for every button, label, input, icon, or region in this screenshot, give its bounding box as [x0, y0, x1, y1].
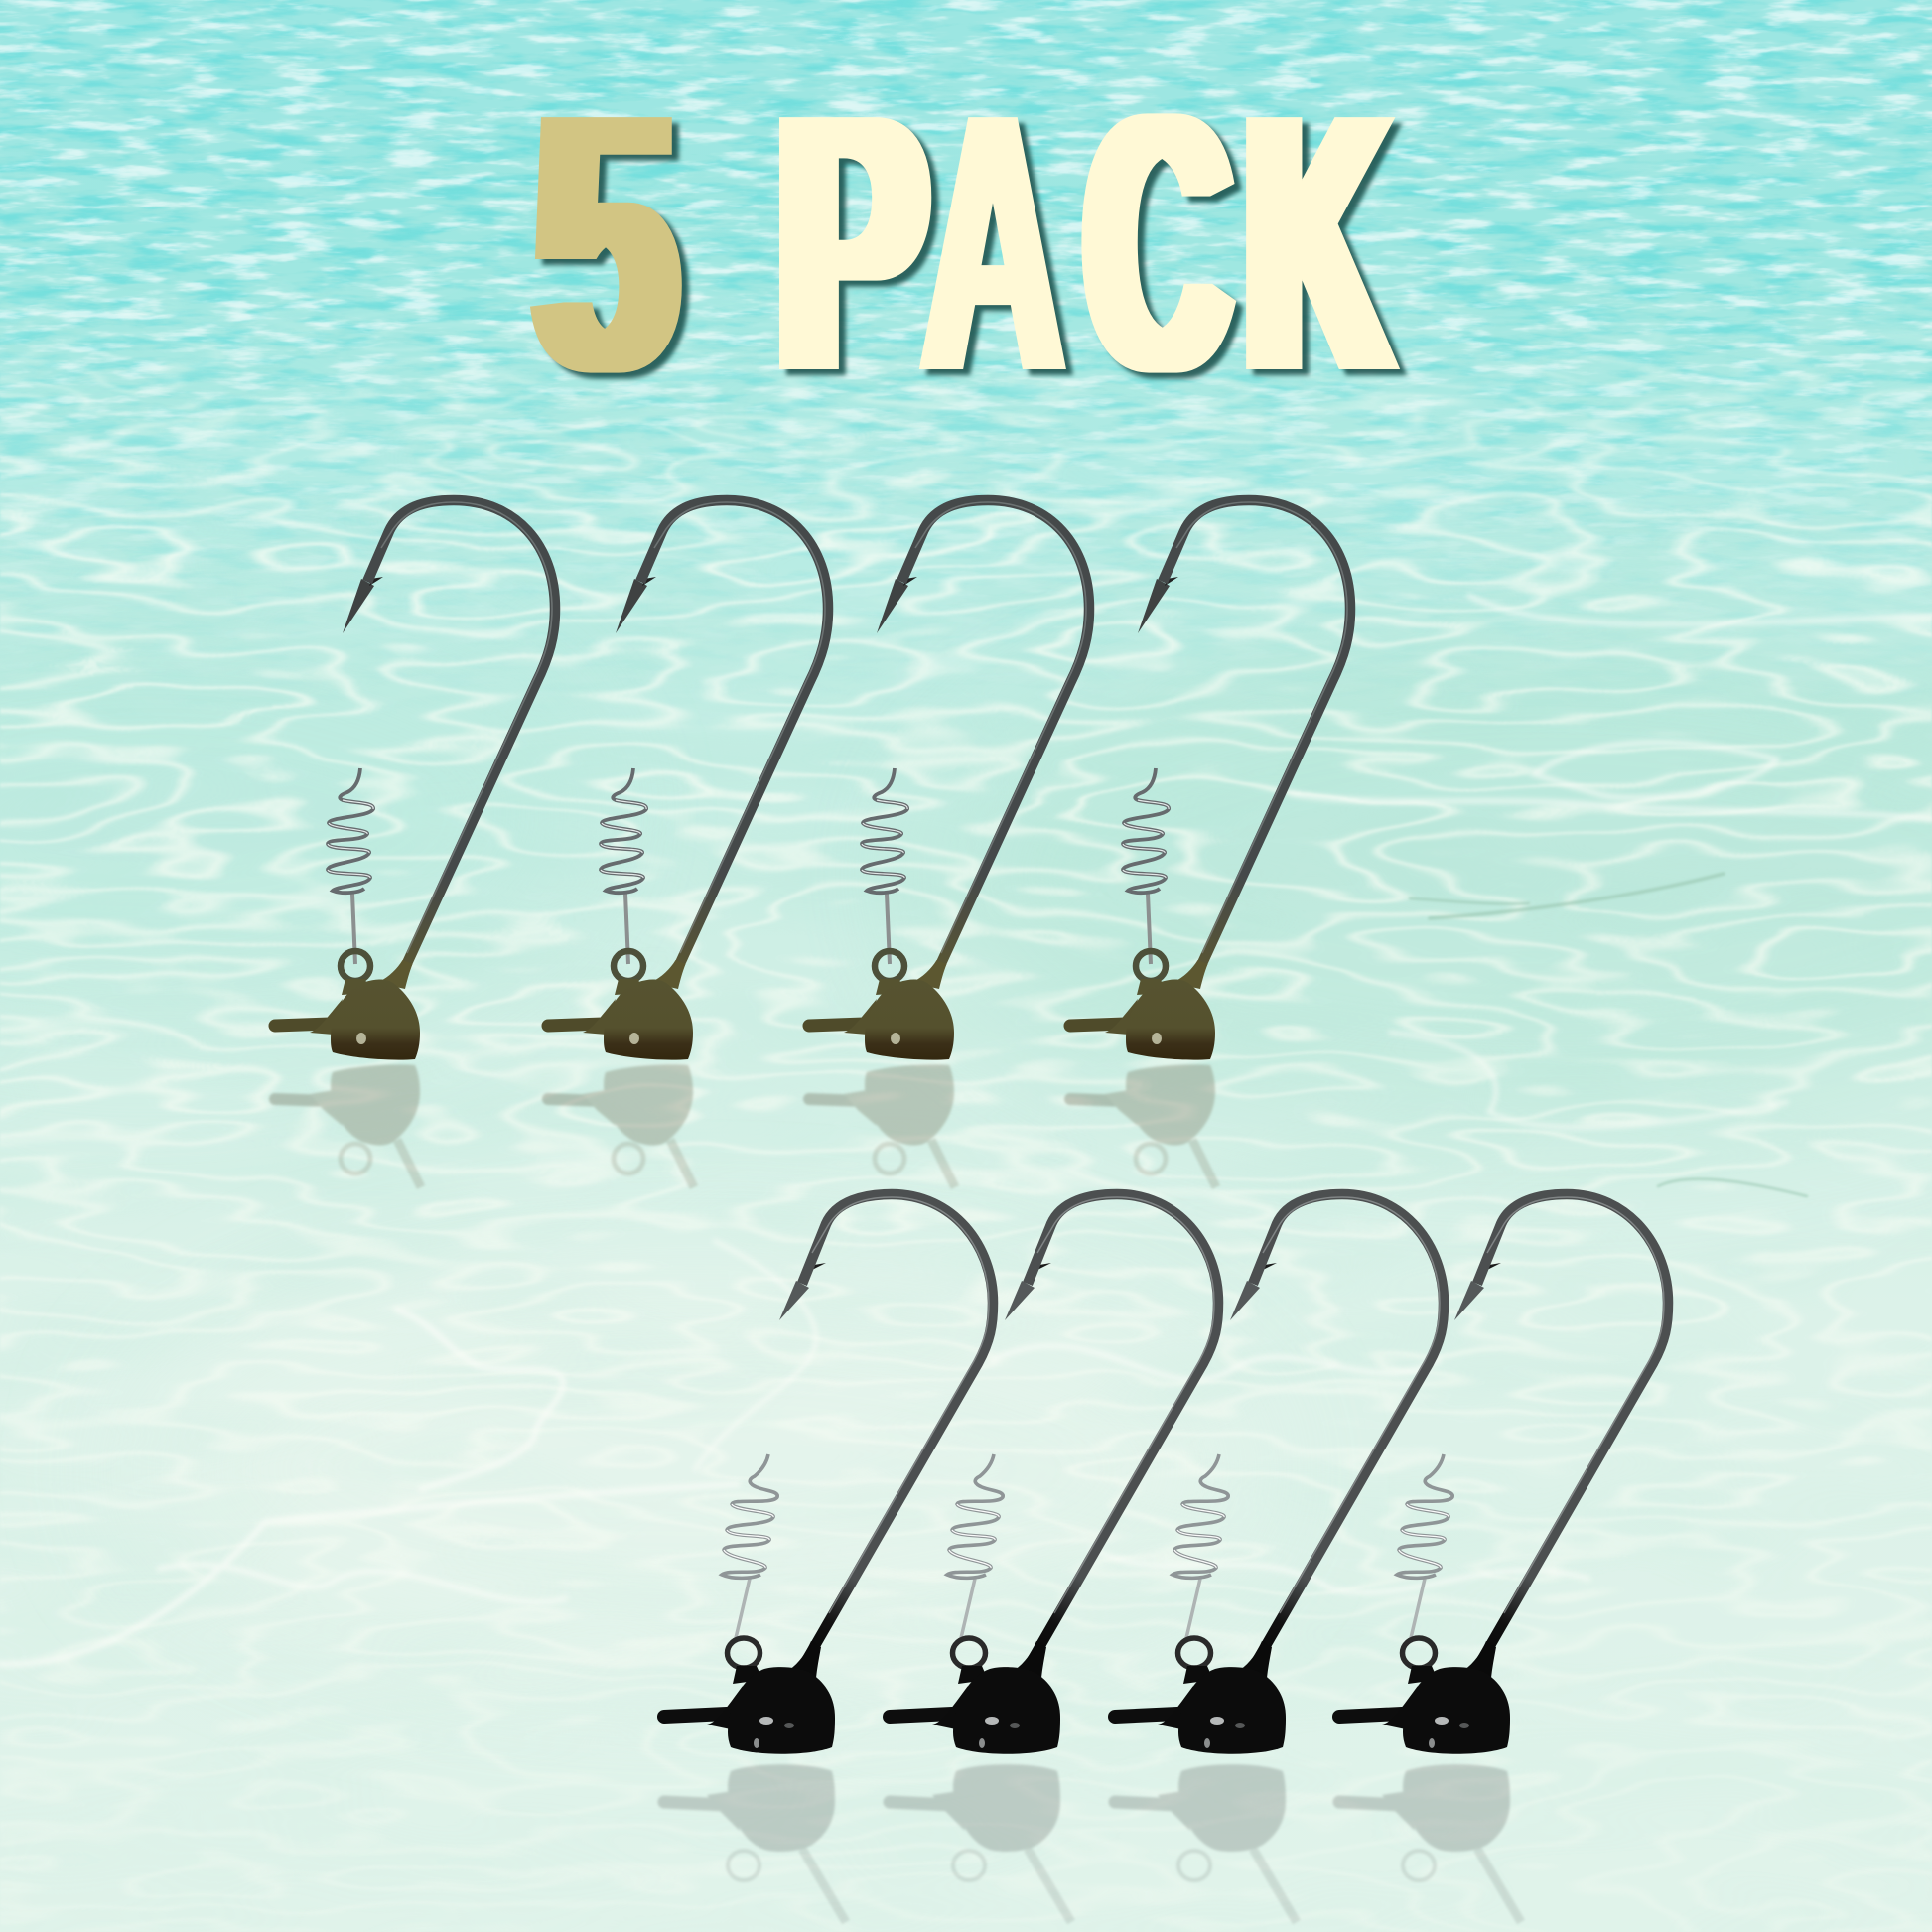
title: 5 PACK	[536, 38, 1388, 448]
row 2: black reflections	[664, 1764, 1521, 1922]
black hook 1	[664, 1194, 993, 1754]
olive hook 4	[1070, 500, 1350, 1060]
title word PACK: A	[922, 38, 1063, 448]
title word PACK	[778, 38, 1388, 448]
row 1: olive jig hooks	[275, 500, 1350, 1060]
title word PACK: P	[778, 40, 925, 448]
title word PACK: C	[1087, 38, 1228, 448]
title word PACK: K	[1247, 38, 1388, 448]
black hook 2	[890, 1194, 1218, 1754]
row 2: black jig hooks	[664, 1194, 1668, 1754]
title numeral 5: 5	[536, 38, 675, 447]
row 1: olive reflections	[275, 1064, 1216, 1187]
bright caustic highlights	[0, 596, 1932, 1664]
green water smears	[1410, 874, 1807, 1196]
black hook 3	[1115, 1194, 1444, 1754]
olive hook 3	[809, 500, 1089, 1060]
olive hook 1	[275, 500, 555, 1060]
black hook 4	[1339, 1194, 1668, 1754]
olive hook 2	[548, 500, 828, 1060]
